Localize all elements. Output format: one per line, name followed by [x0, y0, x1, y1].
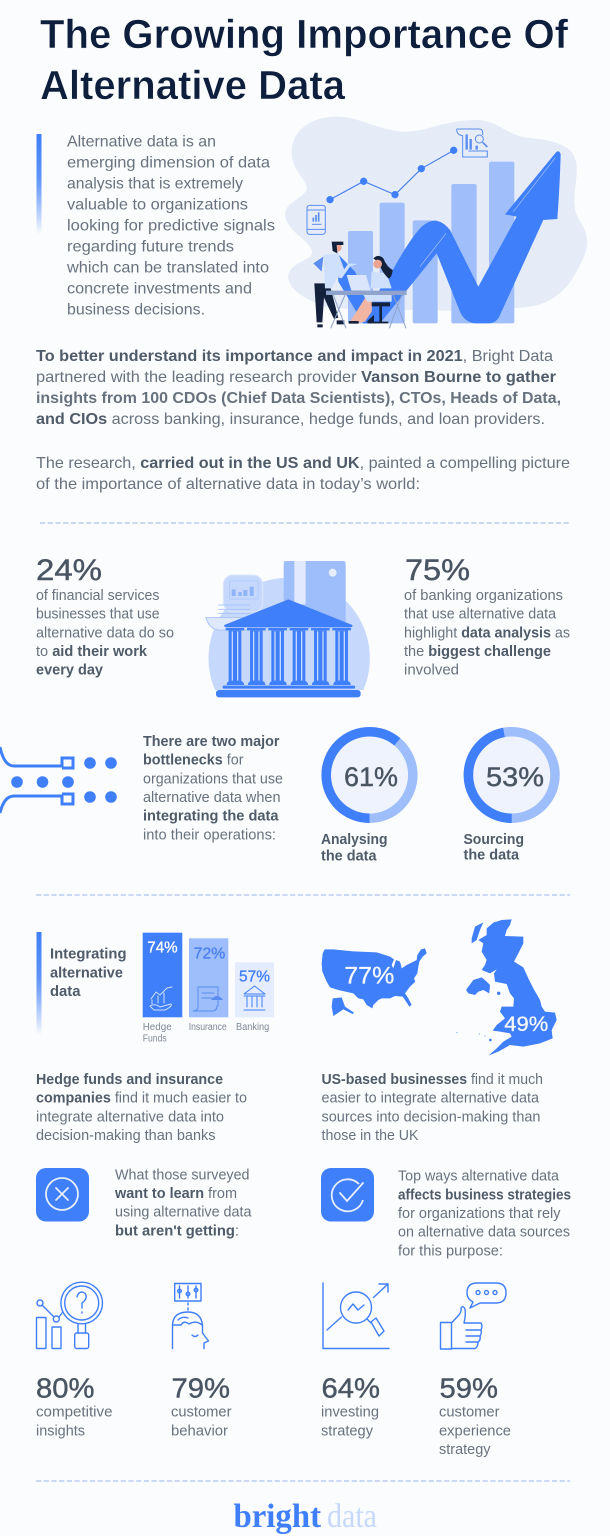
- bar: hedge funds: 74%: [147, 939, 178, 956]
- intro text: which can be translated into: [66, 260, 269, 276]
- donut: 61% analysing the data: 61%: [344, 762, 398, 792]
- intro text: Alternative data is an: [67, 134, 216, 150]
- stat: 80%: [36, 1372, 112, 1439]
- text: affects business strategies: affects business strategies: [398, 1186, 571, 1203]
- stat: 80%: competitive: [36, 1404, 112, 1421]
- stat: 64%: strategy: [321, 1422, 373, 1439]
- stat: 64%: investing: [321, 1404, 379, 1421]
- illustration: growth chart with two people: [285, 117, 587, 328]
- donut: 53% sourcing the data: [464, 732, 555, 864]
- map: US 77%: 77%: [344, 962, 394, 989]
- donut: 53% sourcing the data: Sourcing: [464, 831, 524, 848]
- icon: bank with card and document: [206, 561, 370, 697]
- stat: 80%: insights: [36, 1422, 85, 1439]
- icon: investing strategy chart: [323, 1283, 389, 1348]
- research paragraph: and CIOs across banking, insurance, hedge funds, and loan providers.: [36, 411, 545, 428]
- intro text: analysis that is extremely: [67, 176, 243, 192]
- integrating heading: [50, 946, 126, 1000]
- text: hedge funds and insurance: [36, 1071, 247, 1144]
- research paragraph: partnered with the leading research provider Vanson Bourne to gather: [36, 369, 556, 386]
- research location paragraph: of the importance of alternative data in today’s world:: [36, 476, 420, 493]
- bottlenecks text: bottlenecks for: [143, 752, 244, 769]
- icon: customer behavior head: [172, 1284, 208, 1348]
- stat: 75%: involved: [404, 662, 459, 679]
- stat: 75%: [404, 554, 570, 679]
- trend line: [326, 147, 457, 203]
- text: US-based businesses: easier to integrate alternative data: [322, 1090, 540, 1107]
- research paragraph: [36, 348, 561, 428]
- icon: phone: [307, 205, 325, 234]
- stat: 75%: of banking organizations: [404, 587, 563, 604]
- stat: 75%: highlight data analysis as: [404, 624, 570, 641]
- donut: 53% sourcing the data: the data: [464, 846, 520, 864]
- intro text: business decisions.: [67, 302, 205, 318]
- bar: banking: Banking: [236, 1022, 269, 1033]
- text: want to learn: What those surveyed: [115, 1166, 250, 1183]
- stat: 79%: customer: [171, 1404, 232, 1421]
- donut: 61% analysing the data: Analysing: [321, 831, 388, 848]
- title: The Growing Importance Of: [40, 11, 568, 57]
- intro text: emerging dimension of data: [67, 154, 270, 172]
- map: UK 49%: 49%: [504, 1013, 548, 1036]
- stat: 24%: 24%: [36, 554, 102, 587]
- stat: 59%: customer: [439, 1404, 500, 1421]
- intro text: [66, 134, 275, 318]
- text: hedge funds and insurance: companies find it much easier to: [36, 1090, 247, 1107]
- integrating accent bar: [36, 932, 42, 1035]
- bar: insurance: 72%: [194, 945, 226, 962]
- icon: thumbs up with speech bubble: [440, 1283, 506, 1349]
- research paragraph: To better understand its importance and impact in 2021 , Bright Data: [36, 348, 553, 365]
- stat: 59%: [439, 1372, 511, 1458]
- title: [40, 11, 568, 108]
- text: affects business strategies: on alternative data sources: [398, 1224, 570, 1241]
- icon: report: [457, 129, 487, 157]
- bar chart: integrating by sector: [143, 933, 274, 1045]
- background blob: [285, 117, 587, 312]
- donut: 61% analysing the data: the data: [321, 848, 377, 865]
- integrating heading: alternative: [50, 964, 123, 981]
- stat: 59%: experience: [439, 1422, 511, 1439]
- stat: 24%: every day: [36, 662, 104, 679]
- text: want to learn: using alternative data: [115, 1204, 252, 1221]
- integrating heading: data: [50, 983, 81, 1000]
- bar: hedge funds: Hedge: [143, 1022, 172, 1033]
- stat: 64%: 64%: [322, 1372, 380, 1403]
- text: hedge funds and insurance: decision-making than banks: [36, 1127, 216, 1144]
- bottlenecks text: into their operations:: [143, 826, 276, 843]
- stat: 64%: [321, 1372, 380, 1439]
- logo: bright data: data: [327, 1498, 377, 1535]
- stat: 80%: 80%: [36, 1372, 94, 1403]
- research location paragraph: [36, 455, 570, 493]
- icon: competitive insights magnifier: [36, 1282, 102, 1348]
- text: US-based businesses: [322, 1071, 543, 1144]
- text: want to learn: but aren't getting:: [115, 1222, 239, 1239]
- stat: 24%: [36, 554, 174, 679]
- map: UK 49%: [456, 919, 557, 1056]
- stat: 75%: that use alternative data: [404, 606, 557, 623]
- icon: cross in box: [36, 1168, 89, 1222]
- bar: hedge funds: [143, 933, 182, 1045]
- map: US 77%: [322, 948, 427, 1016]
- bar: insurance: [189, 938, 228, 1033]
- text: affects business strategies: for organizations that rely: [398, 1205, 561, 1222]
- logo: bright data: bright: [234, 1498, 322, 1535]
- stat: 24%: of financial services: [36, 587, 160, 604]
- intro text: regarding future trends: [67, 238, 234, 256]
- bottlenecks text: There are two major: [143, 733, 280, 750]
- bottlenecks text: organizations that use: [143, 770, 283, 787]
- man: [313, 242, 357, 327]
- stat: 24%: alternative data do so: [36, 624, 174, 641]
- stat: 59%: strategy: [439, 1441, 491, 1458]
- integrating heading: Integrating: [50, 946, 126, 963]
- icon: bottleneck funnel: [0, 747, 117, 813]
- intro text: looking for predictive signals: [67, 218, 275, 234]
- stat: 79%: [171, 1372, 232, 1439]
- bottlenecks text: integrating the data: [143, 808, 279, 825]
- bar: hedge funds: Funds: [143, 1034, 167, 1045]
- stat: 24%: to aid their work: [36, 643, 148, 660]
- text: affects business strategies: [398, 1168, 571, 1259]
- stat: 79%: 79%: [172, 1372, 230, 1403]
- title: Alternative Data: [40, 62, 346, 108]
- bar: insurance: Insurance: [189, 1022, 227, 1033]
- text: hedge funds and insurance: Hedge funds and insurance: [36, 1071, 223, 1088]
- research paragraph: insights from 100 CDOs (Chief Data Scientists), CTOs, Heads of Data,: [36, 390, 561, 407]
- stat: 79%: behavior: [171, 1422, 228, 1439]
- icon: check in box: [321, 1168, 374, 1222]
- bar: banking: [235, 962, 274, 1033]
- intro accent bar: [36, 134, 42, 234]
- research location paragraph: The research, carried out in the US and UK, painted a compelling picture: [36, 455, 570, 472]
- intro text: valuable to organizations: [67, 196, 248, 214]
- rising arrow: [337, 151, 561, 323]
- text: US-based businesses: sources into decision-making than: [322, 1108, 540, 1125]
- text: US-based businesses: US-based businesses find it much: [322, 1071, 543, 1088]
- intro text: concrete investments and: [67, 280, 252, 298]
- stat: 75%: 75%: [405, 554, 470, 587]
- text: want to learn: [114, 1166, 252, 1239]
- bars: [348, 162, 514, 323]
- text: affects business strategies: Top ways alternative data: [398, 1168, 560, 1185]
- donut: 53% sourcing the data: 53%: [486, 762, 544, 792]
- bar: banking: 57%: [239, 969, 270, 986]
- logo: bright data: [234, 1498, 377, 1535]
- stat: 75%: the biggest challenge: [404, 643, 551, 660]
- table and woman: [326, 256, 407, 328]
- stat: 59%: 59%: [440, 1372, 498, 1403]
- donut: 61% analysing the data: [321, 732, 413, 865]
- bottlenecks text: alternative data when: [143, 789, 280, 806]
- stat: 24%: businesses that use: [36, 606, 160, 623]
- bottlenecks text: [143, 733, 283, 843]
- text: US-based businesses: those in the UK: [322, 1127, 418, 1144]
- text: hedge funds and insurance: integrate alternative data into: [36, 1108, 224, 1125]
- text: affects business strategies: for this purpose:: [398, 1242, 503, 1259]
- text: want to learn: want to learn from: [114, 1185, 237, 1202]
